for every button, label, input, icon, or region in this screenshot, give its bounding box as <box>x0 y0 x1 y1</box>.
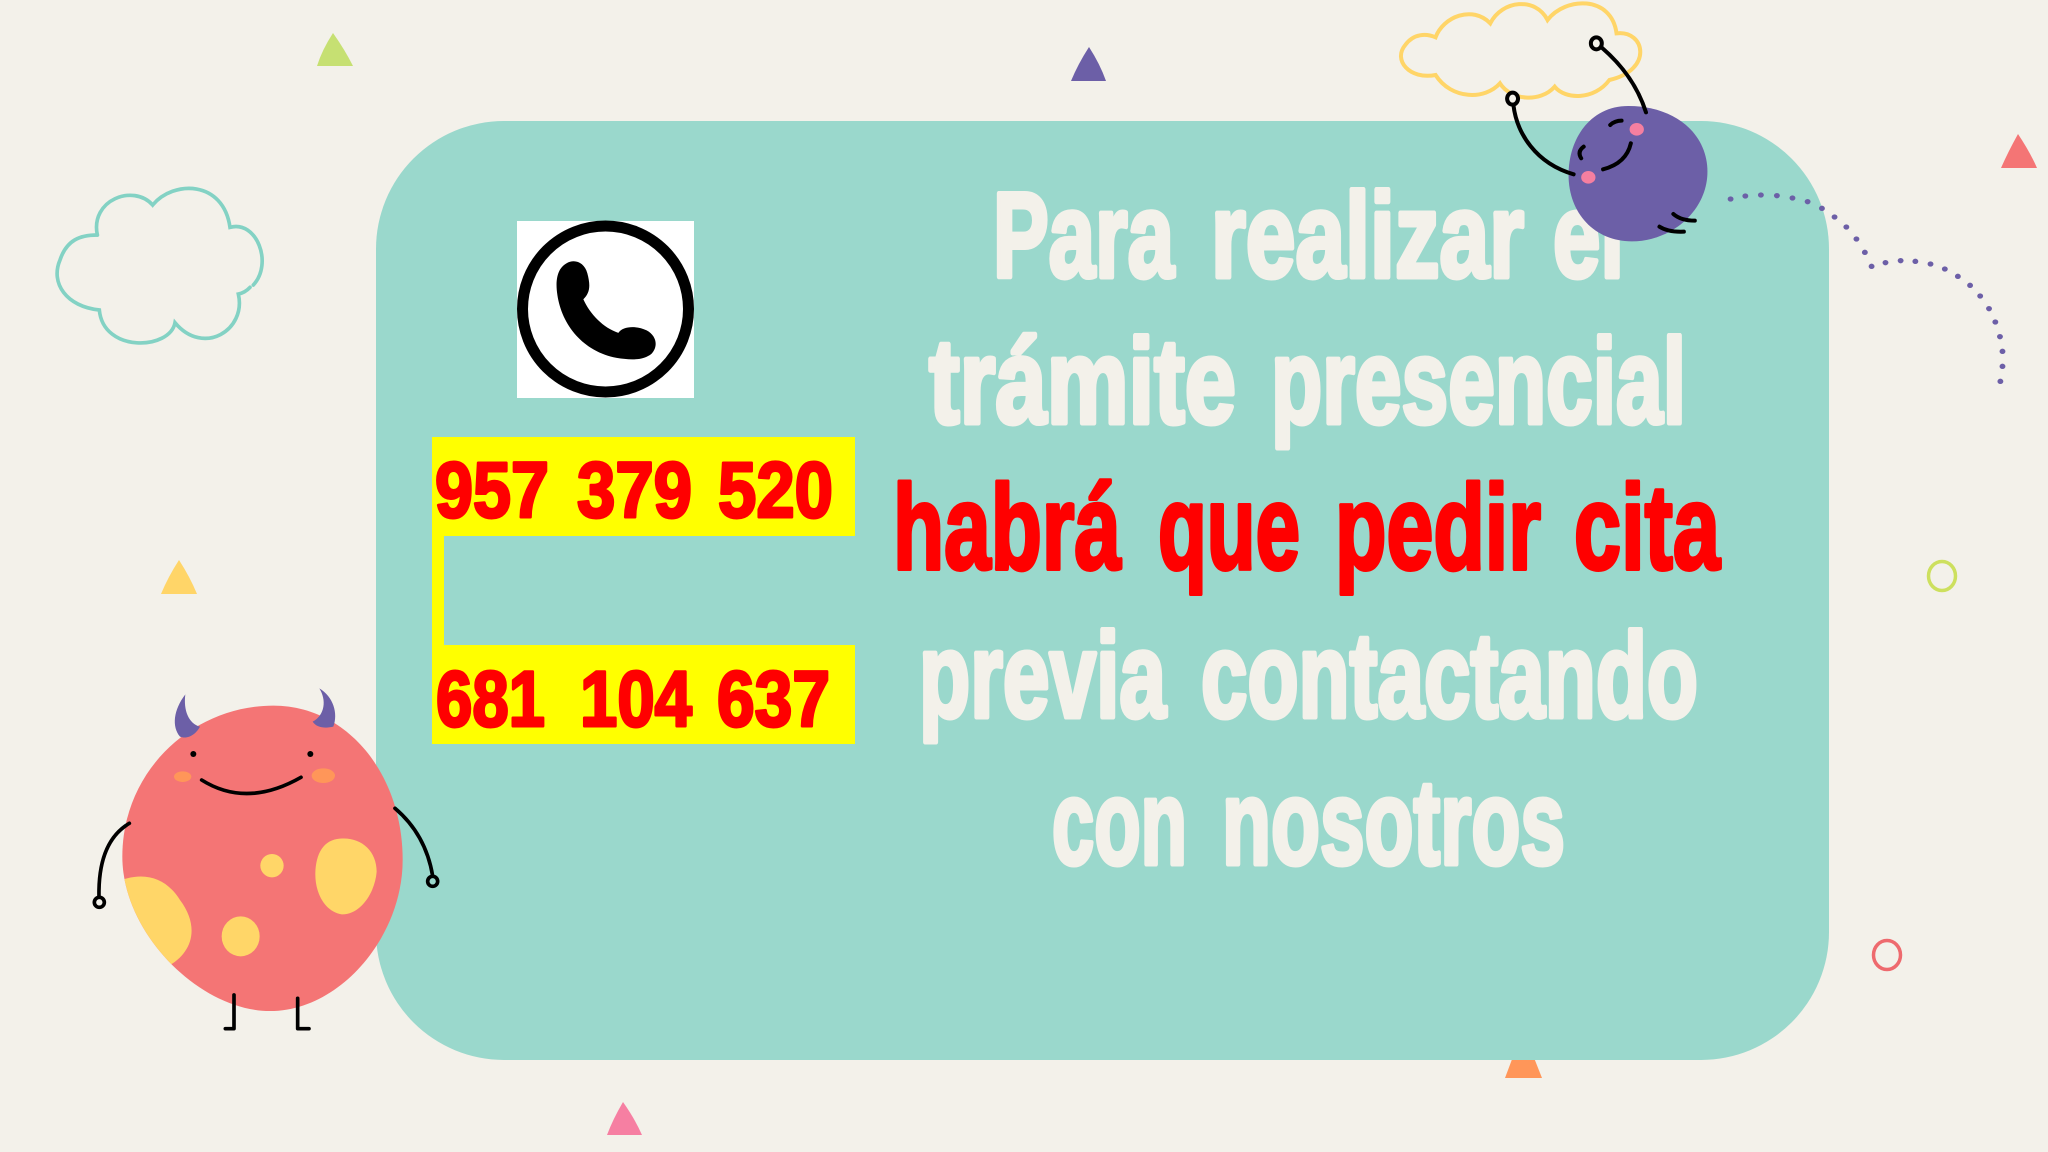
cloud: teal outline <box>57 188 262 343</box>
left horn <box>175 694 200 738</box>
icon background <box>517 221 694 398</box>
number two: 637 <box>717 654 830 743</box>
number two: 681 <box>436 654 545 743</box>
triangle: orange <box>1505 1030 1542 1078</box>
line 5: con <box>1052 754 1187 890</box>
eye left <box>190 751 196 757</box>
number two highlight <box>432 645 855 744</box>
line 3 highlighted <box>893 459 1721 595</box>
number one <box>435 445 833 534</box>
line 2 <box>929 313 1686 449</box>
large spot right <box>315 838 377 914</box>
line 5 <box>1052 754 1565 890</box>
icon handset <box>557 261 656 359</box>
ring: red <box>1874 940 1900 970</box>
line 5: nosotros <box>1222 754 1565 890</box>
number one: 957 <box>435 445 549 534</box>
panel: teal rounded card <box>376 121 1829 1060</box>
triangle: green <box>317 33 353 66</box>
number two <box>436 654 830 743</box>
line 1 <box>993 167 1624 303</box>
number one: 520 <box>718 445 833 534</box>
triangle: pink <box>607 1102 642 1135</box>
icon ring <box>522 226 688 392</box>
connector strip <box>432 536 444 645</box>
purple cheek left <box>1581 171 1595 184</box>
medium spot <box>222 916 260 956</box>
line 3 highlighted: que <box>1158 459 1300 595</box>
line 1: Para <box>993 167 1175 303</box>
character: red monster <box>94 688 438 1029</box>
number one: 379 <box>577 445 692 534</box>
large spot left <box>124 876 192 964</box>
line 4: previa <box>919 607 1167 743</box>
triangle: purple <box>1071 47 1106 81</box>
line 3 highlighted: habrá <box>893 459 1121 595</box>
purple cheek right <box>1630 123 1644 136</box>
red body <box>122 706 403 1011</box>
dotted trail <box>1728 192 2005 384</box>
line 2: presencial <box>1271 313 1686 449</box>
ring: green <box>1928 562 1956 590</box>
line 1: el <box>1553 167 1624 303</box>
number two: 104 <box>580 654 692 743</box>
line 4: contactando <box>1201 607 1698 743</box>
line 2: trámite <box>929 313 1236 449</box>
phone numbers block <box>432 437 855 744</box>
purple body <box>1569 106 1707 241</box>
purple arms and face lines <box>1507 37 1695 232</box>
character: purple monster <box>1507 37 1707 241</box>
triangle: yellow <box>161 560 197 594</box>
eye right <box>307 751 313 757</box>
phone icon <box>517 221 694 398</box>
right horn <box>313 688 335 728</box>
triangle: red <box>2001 134 2037 168</box>
small spot <box>260 854 284 877</box>
main message <box>893 167 1721 890</box>
line 3 highlighted: pedir <box>1335 459 1541 595</box>
line 4 <box>919 607 1698 743</box>
line 3 highlighted: cita <box>1574 459 1721 595</box>
cloud: yellow outline <box>1401 3 1640 98</box>
line 1: realizar <box>1211 167 1524 303</box>
number one highlight <box>432 437 855 536</box>
cheek right <box>312 768 335 783</box>
smile and limbs <box>94 777 438 1029</box>
cheek left <box>174 771 191 782</box>
